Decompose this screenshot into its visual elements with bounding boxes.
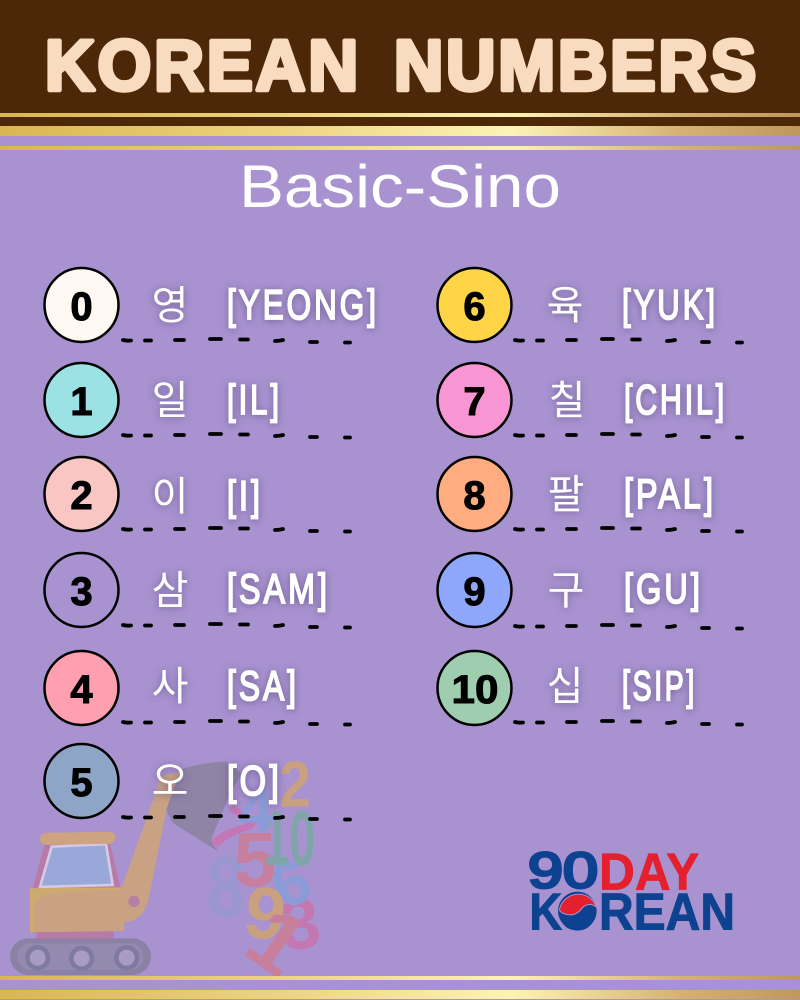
logo word KOREAN: O [558, 882, 597, 940]
row: 3 sam: 3 [70, 570, 93, 614]
icon: excavator base [37, 928, 114, 942]
row: 3 sam: [SAM] [227, 565, 330, 612]
logo word KOREAN: REAN [599, 882, 735, 940]
icon: tumbling numbers: 4 [238, 776, 274, 846]
icon: tumbling numbers: 3 [275, 882, 325, 967]
icon: tumbling numbers: 2 [279, 748, 311, 821]
row: 7 chil: 7 [463, 380, 486, 424]
row: 2 i: 이 [152, 475, 188, 519]
row: 5 o: 오 [152, 760, 188, 804]
row: 3 sam [44, 553, 350, 628]
row: 5 o: 5 [70, 761, 93, 805]
row: 7 chil: [CHIL] [624, 376, 727, 423]
row: 9 gu [438, 553, 742, 628]
row: 2 i [44, 457, 350, 532]
row: 0 yeong: [YEONG] [227, 281, 379, 328]
row: 1 il: 일 [152, 379, 188, 423]
row: 0 yeong: 영 [152, 284, 188, 328]
row: 2 i: [I] [227, 472, 263, 519]
footer gold lines [0, 976, 800, 999]
logo: 90 Day Korean [528, 842, 735, 940]
row: 6 yuk: 육 [547, 284, 583, 328]
icon: cab roof [40, 832, 115, 845]
row: 4 sa: 4 [70, 668, 93, 712]
illustration: excavator scooping numbers [10, 748, 325, 995]
row: 3 sam: 삼 [152, 569, 188, 613]
row: 4 sa: [SA] [227, 662, 299, 709]
icon: cab frame [33, 843, 121, 888]
row: 8 pal: 팔 [548, 473, 584, 517]
row: 4 sa [44, 651, 350, 725]
row: 7 chil [438, 363, 742, 438]
icon: tumbling numbers: 5 [234, 819, 276, 904]
row: 6 yuk: [YUK] [622, 281, 718, 328]
row: 5 o: [O] [227, 757, 282, 804]
row: 9 gu: 9 [463, 570, 486, 614]
row: 5 o [44, 744, 350, 820]
title: KOREAN [45, 27, 361, 106]
icon: arm joint [128, 896, 140, 907]
icon: tumbling numbers: 8 [206, 840, 245, 936]
icon: excavator bucket [157, 762, 242, 852]
row: 1 il [44, 363, 350, 438]
title [45, 27, 759, 106]
logo word KOREAN: K [529, 882, 562, 940]
icon: tumbling numbers [195, 748, 325, 995]
subtitle: Basic-Sino [239, 153, 561, 220]
row: 10 sip: [SIP] [622, 662, 697, 709]
icon: tumbling numbers: 10 [263, 794, 315, 882]
icon: tumbling numbers: 9 [239, 870, 291, 957]
row: 6 yuk [438, 268, 742, 342]
row: 7 chil: 칠 [549, 379, 585, 423]
row: 2 i: 2 [70, 474, 93, 518]
row: 1 il: 1 [70, 380, 93, 424]
row: 6 yuk: 6 [463, 285, 486, 329]
row: 4 sa: 사 [152, 665, 188, 709]
logo word DAY: DAY [599, 842, 699, 900]
icon: caterpillar track [10, 938, 151, 975]
row: 10 sip [438, 651, 742, 725]
row: 8 pal [438, 457, 742, 532]
logo taegeuk mark [558, 892, 597, 930]
row: 8 pal: 8 [463, 474, 486, 518]
logo number 90: 90 [528, 842, 598, 898]
row: 0 yeong: 0 [70, 285, 93, 329]
row: 10 sip: 10 [452, 668, 498, 712]
row: 9 gu: [GU] [624, 565, 703, 612]
icon: cab window [40, 844, 113, 887]
title: NUMBERS [394, 27, 759, 106]
icon: tumbling numbers: 7 [195, 793, 267, 869]
icon: tumbling numbers: 1 [229, 889, 324, 995]
row: 1 il: [IL] [227, 376, 282, 423]
header band [0, 0, 800, 150]
row: 10 sip: 십 [547, 665, 583, 709]
icon: tumbling numbers: 6 [260, 845, 322, 923]
row: 8 pal: [PAL] [624, 470, 716, 517]
row: 9 gu: 구 [548, 569, 584, 613]
row: 0 yeong [44, 268, 379, 342]
icon: excavator arm and body [30, 772, 180, 932]
logo word KOREAN [529, 882, 735, 940]
